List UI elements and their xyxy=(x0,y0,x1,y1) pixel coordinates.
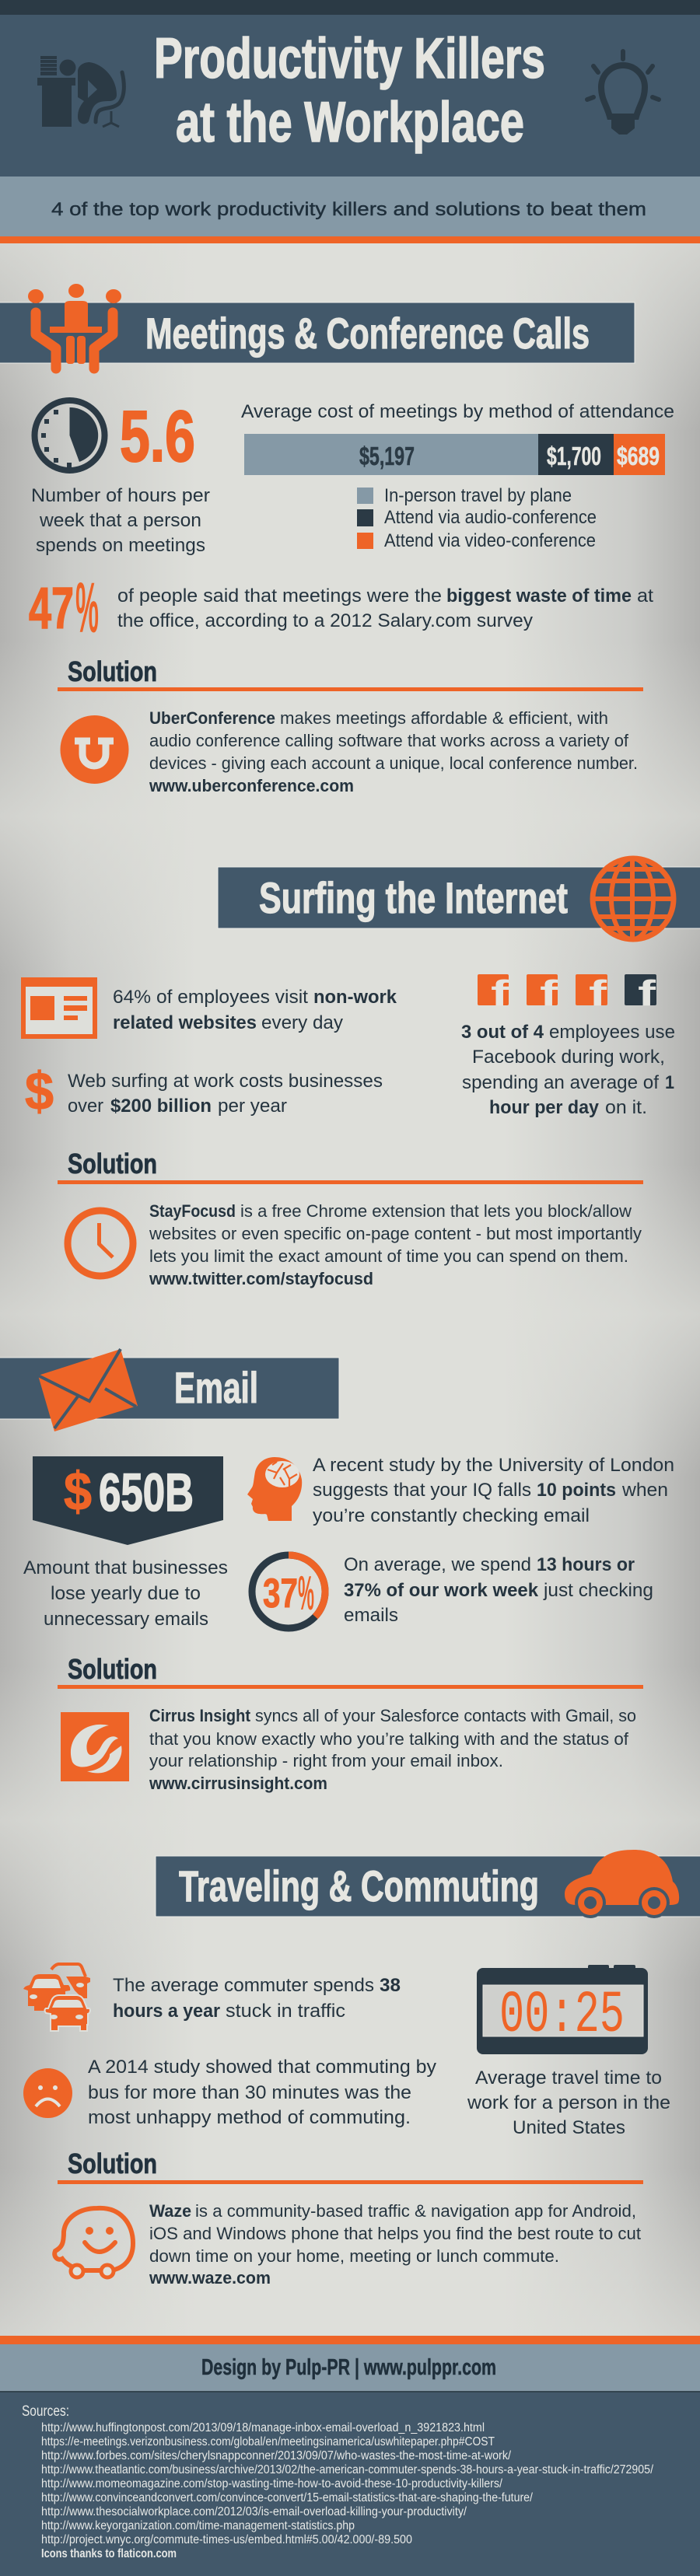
text: facebook use: spending an average of xyxy=(462,1072,659,1093)
text: StayFocusd solution: StayFocusd xyxy=(149,1201,236,1221)
title: at the Workplace xyxy=(176,91,524,154)
text: hours in traffic: 38 xyxy=(380,1975,401,1996)
text: StayFocusd solution: lets you limit the exact amount of time you can spend on them. xyxy=(149,1246,628,1266)
text: hours in traffic: The average commuter spends xyxy=(113,1975,374,1996)
footer credit band xyxy=(0,2336,700,2391)
title xyxy=(154,27,545,154)
section banner: surfing xyxy=(218,867,700,928)
text: Waze solution: down time on your home, meeting or lunch commute. xyxy=(149,2246,559,2266)
text: StayFocusd solution xyxy=(149,1201,642,1288)
section banner: surfing: Surfing the Internet xyxy=(259,873,568,922)
sources panel: http://www.keyorganization.com/time-management-statistics.php xyxy=(41,2519,355,2532)
sources panel: http://www.momeomagazine.com/stop-wasting-time-how-to-avoid-these-10-productivity-killers/ xyxy=(41,2477,503,2490)
chart: cost of meetings by attendance method: $689 xyxy=(617,442,660,470)
icons: facebook 3 of 4: f xyxy=(540,973,558,1013)
text: non-work websites: non-work xyxy=(313,987,397,1008)
sources panel: Icons thanks to flaticon.com xyxy=(41,2547,177,2560)
section: email xyxy=(0,1349,674,1793)
text: non-work websites: every day xyxy=(261,1012,343,1033)
stat: 5.6 hours: 5.6 xyxy=(120,396,195,477)
solution heading xyxy=(58,1653,643,1689)
text: hours in traffic: stuck in traffic xyxy=(226,2001,345,2022)
text: average travel time: United States xyxy=(513,2117,625,2138)
text: facebook use: 3 out of 4 xyxy=(461,1022,544,1043)
icons: facebook 3 of 4: f xyxy=(491,973,509,1013)
text: unhappy commute study xyxy=(88,2057,436,2128)
chart: 37 percent donut xyxy=(252,1555,325,1628)
text: time checking email: emails xyxy=(344,1605,398,1626)
text: amount lost xyxy=(23,1557,228,1630)
text: biggest waste of time: biggest waste of time xyxy=(446,585,632,606)
text: amount lost: unnecessary emails xyxy=(44,1609,208,1630)
icon: light bulb xyxy=(587,51,659,135)
text: time checking email: just checking xyxy=(543,1580,653,1601)
chart: cost of meetings by attendance method: $5,197 xyxy=(359,442,415,470)
text: hours description: Number of hours per xyxy=(31,485,210,506)
header panel xyxy=(0,0,700,177)
text: IQ study: suggests that your IQ falls xyxy=(313,1480,531,1501)
section banner: meetings xyxy=(0,302,635,363)
chart: cost of meetings by attendance method: $1,700 xyxy=(547,442,601,470)
text: amount lost: lose yearly due to xyxy=(51,1583,201,1604)
icon: dollar sign: $ xyxy=(25,1061,54,1121)
text: facebook use: hour per day xyxy=(489,1097,600,1118)
icon: traffic jam xyxy=(23,1964,90,2031)
sources panel: http://www.convinceandconvert.com/convince-convert/15-email-statistics-that-are-shaping-the-future/ xyxy=(41,2491,534,2504)
text: web surfing cost: over xyxy=(68,1096,103,1117)
text: web surfing cost: $200 billion xyxy=(110,1096,212,1117)
solution heading: Solution xyxy=(68,1148,157,1180)
text: average travel time: Average travel time to xyxy=(475,2067,662,2088)
text: unhappy commute study: most unhappy method of commuting. xyxy=(88,2107,411,2128)
stat badge: 650B: $ xyxy=(64,1461,92,1522)
sources panel: https://e-meetings.verizonbusiness.com/global/en/meetingsinamerica/uswhitepaper.php#COST xyxy=(41,2435,495,2448)
sources panel: http://www.forbes.com/sites/cherylsnappconner/2013/09/07/who-wastes-the-most-time-at-work/ xyxy=(41,2449,512,2462)
text: StayFocusd solution: www.twitter.com/stayfocusd xyxy=(149,1269,373,1288)
text: UberConference solution: UberConference xyxy=(149,708,275,728)
stat badge: 650B: 650B xyxy=(99,1463,194,1522)
icon: tired person at desk xyxy=(37,56,124,127)
title: Productivity Killers xyxy=(154,27,545,90)
text: hours description: spends on meetings xyxy=(36,535,205,556)
text: facebook use: Facebook during work, xyxy=(472,1047,665,1068)
text: facebook use: 1 xyxy=(665,1072,674,1093)
text: StayFocusd solution: is a free Chrome extension that lets you block/allow xyxy=(240,1201,632,1221)
text: time checking email xyxy=(344,1554,653,1626)
icon: digital timer 00:25 xyxy=(477,1965,648,2054)
text: StayFocusd solution: websites or even specific on-page content - but most importantly xyxy=(149,1224,642,1243)
text: non-work websites: 64% of employees visit xyxy=(113,987,308,1008)
text: hours description xyxy=(31,485,210,556)
text: IQ study: 10 points xyxy=(537,1480,616,1501)
text: Cirrus Insight solution: Cirrus Insight xyxy=(149,1706,251,1725)
text: average travel time: work for a person in the xyxy=(467,2092,670,2113)
text: UberConference solution: makes meetings affordable & efficient, with xyxy=(280,708,608,728)
text: UberConference solution: devices - giving each account a unique, local conference number. xyxy=(149,753,638,773)
solution heading xyxy=(58,655,643,691)
text: Cirrus Insight solution xyxy=(149,1706,636,1793)
text: UberConference solution: www.uberconference.com xyxy=(149,776,354,795)
section: traveling and commuting xyxy=(23,1850,700,2288)
icon: globe xyxy=(587,855,679,942)
icon: digital timer 00:25: 00:25 xyxy=(499,1982,625,2049)
text: time checking email: 37% of our work week xyxy=(344,1580,539,1601)
icon: clock with wedge xyxy=(34,400,104,470)
text: Waze solution xyxy=(149,2201,641,2288)
icon: Waze logo xyxy=(54,2208,133,2277)
footer credit band: Design by Pulp-PR | www.pulppr.com xyxy=(201,2355,496,2380)
sources panel: http://www.huffingtonpost.com/2013/09/18/manage-inbox-email-overload_n_3921823.html xyxy=(41,2421,485,2434)
chart legend: Attend via audio-conference xyxy=(384,507,597,528)
chart legend: In-person travel by plane xyxy=(384,485,572,506)
text: IQ study: A recent study by the University of London xyxy=(313,1455,674,1476)
solution heading xyxy=(58,2148,643,2184)
text: Waze solution: www.waze.com xyxy=(149,2268,271,2288)
text: web surfing cost xyxy=(68,1071,383,1117)
text: unhappy commute study: A 2014 study showed that commuting by xyxy=(88,2057,436,2078)
text: biggest waste of time: at xyxy=(637,585,653,606)
text: biggest waste of time xyxy=(117,585,653,631)
icon: car xyxy=(565,1850,679,1918)
text: facebook use: on it. xyxy=(605,1097,647,1118)
icon: StayFocusd clock xyxy=(68,1211,133,1276)
section banner: email: Email xyxy=(174,1363,258,1412)
sources panel: http://project.wnyc.org/commute-times-us/embed.html#5.00/42.000/-89.500 xyxy=(41,2533,412,2546)
icons: facebook 3 of 4: f xyxy=(589,973,607,1013)
text: Cirrus Insight solution: that you know exactly who you’re talking with and the status of xyxy=(149,1729,629,1749)
solution heading: Solution xyxy=(68,2148,157,2179)
text: UberConference solution: audio conference calling software that works across a variety of xyxy=(149,731,629,750)
icon: web page xyxy=(21,977,97,1039)
icon: UberConference logo xyxy=(61,715,129,784)
text: unhappy commute study: bus for more than 30 minutes was the xyxy=(88,2082,411,2103)
text: web surfing cost: Web surfing at work costs businesses xyxy=(68,1071,383,1092)
chart: cost of meetings by attendance method xyxy=(241,401,674,551)
solution heading xyxy=(58,1148,643,1184)
text: Waze solution: is a community-based traffic & navigation app for Android, xyxy=(195,2201,636,2221)
section: meetings and conference calls: % xyxy=(75,568,99,648)
text: hours in traffic xyxy=(113,1975,401,2022)
icons: facebook 3 of 4: f xyxy=(638,973,656,1013)
text: amount lost: Amount that businesses xyxy=(23,1557,228,1578)
sources panel xyxy=(0,2391,700,2576)
text: average travel time xyxy=(467,2067,670,2138)
icon: head with brain xyxy=(247,1457,302,1521)
text: biggest waste of time: of people said that meetings were the xyxy=(117,585,442,606)
text: web surfing cost: per year xyxy=(218,1096,287,1117)
icon: envelope xyxy=(38,1349,138,1431)
stat badge: 650B xyxy=(33,1456,223,1545)
section: meetings and conference calls xyxy=(0,284,674,795)
text: UberConference solution xyxy=(149,708,638,795)
text: hours description: week that a person xyxy=(39,510,201,531)
section: surfing the internet xyxy=(21,855,700,1288)
chart legend: Attend via video-conference xyxy=(384,530,596,551)
text: IQ study xyxy=(313,1455,674,1526)
text: non-work websites xyxy=(113,987,397,1033)
icons: facebook 3 of 4 xyxy=(478,973,656,1013)
solution heading: Solution xyxy=(68,1653,157,1685)
sources panel: http://www.thesocialworkplace.com/2012/03/is-email-overload-killing-your-productivity/ xyxy=(41,2505,467,2518)
text: Waze solution: iOS and Windows phone that helps you find the best route to cut xyxy=(149,2224,641,2243)
subtitle band xyxy=(0,177,700,243)
stat: 47 percent: 47 xyxy=(29,575,74,641)
text: Cirrus Insight solution: www.cirrusinsight.com xyxy=(149,1774,327,1793)
chart: cost of meetings by attendance method: Average cost of meetings by method of attendance xyxy=(241,401,674,422)
text: facebook use: employees use xyxy=(549,1022,675,1043)
chart: 37 percent donut: 37 xyxy=(263,1571,298,1617)
text: hours in traffic: hours a year xyxy=(113,2001,220,2022)
icon: sad face xyxy=(23,2068,72,2118)
text: time checking email: On average, we spend xyxy=(344,1554,531,1575)
chart legend xyxy=(357,485,597,551)
section banner: email xyxy=(0,1358,339,1419)
section banner: traveling: Traveling & Commuting xyxy=(179,1861,539,1910)
text: Waze solution: Waze xyxy=(149,2201,191,2221)
text: IQ study: you’re constantly checking email xyxy=(313,1505,590,1526)
text: biggest waste of time: the office, according to a 2012 Salary.com survey xyxy=(117,610,533,631)
chart: 37 percent donut: % xyxy=(298,1567,314,1620)
text: facebook use xyxy=(461,1022,675,1118)
solution heading: Solution xyxy=(68,655,157,687)
text: IQ study: when xyxy=(621,1480,668,1501)
subtitle band: 4 of the top work productivity killers and solutions to beat them xyxy=(51,199,646,220)
icon: Cirrus Insight logo xyxy=(61,1712,129,1781)
sources panel: Sources: xyxy=(22,2403,69,2420)
text: Cirrus Insight solution: your relationship - right from your email inbox. xyxy=(149,1751,503,1770)
text: non-work websites: related websites xyxy=(113,1012,257,1033)
sources panel: http://www.theatlantic.com/business/archive/2013/02/the-american-commuter-spends-38-hours-a-year-stuck-in-traffic/272905/ xyxy=(41,2463,654,2476)
icon: meeting table xyxy=(28,284,121,369)
text: time checking email: 13 hours or xyxy=(537,1554,635,1575)
text: Cirrus Insight solution: syncs all of your Salesforce contacts with Gmail, so xyxy=(255,1706,636,1725)
